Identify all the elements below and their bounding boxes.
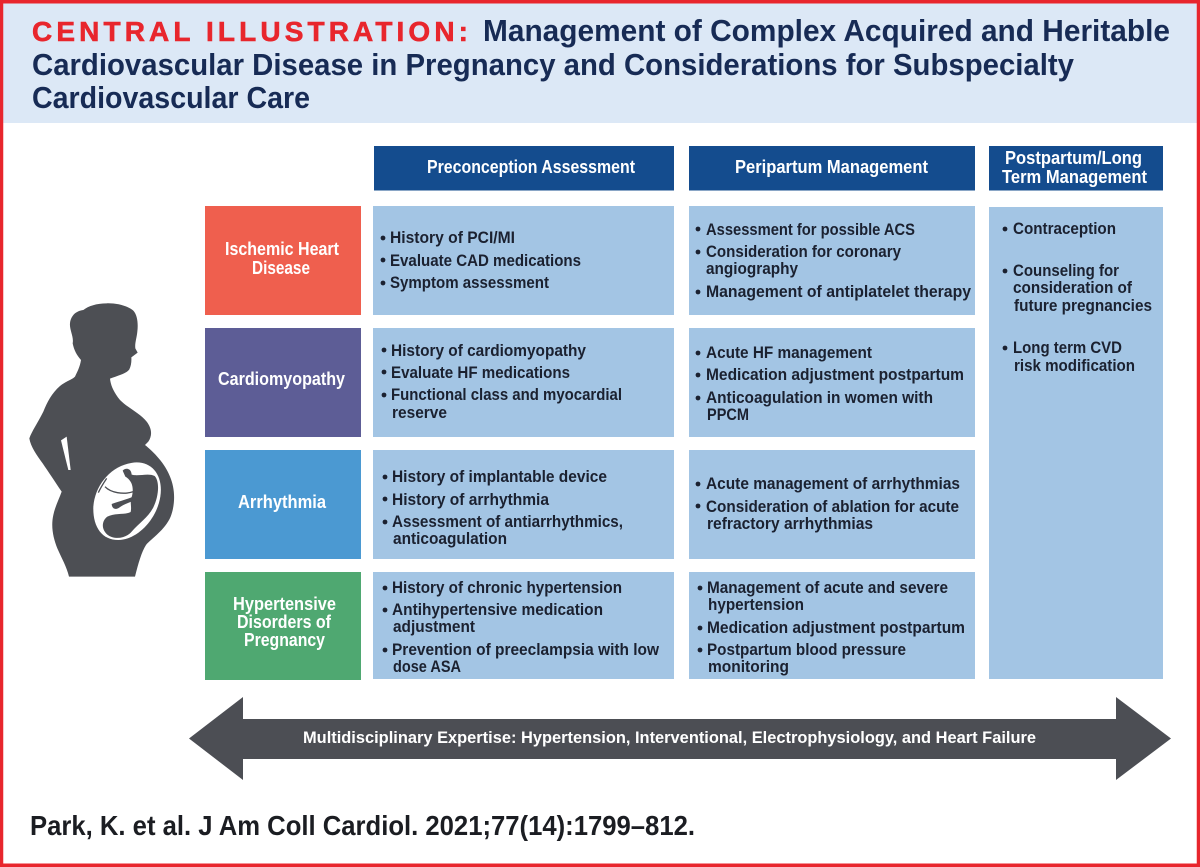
panel: postpartum long term management: risk modification bbox=[1014, 356, 1135, 375]
row label: hypertensive disorders of pregnancy: Pregnancy bbox=[244, 629, 326, 650]
panel: preconception hypertensive disorders: Prevention of preeclampsia with low bbox=[392, 640, 660, 659]
panel: peripartum cardiomyopathy: PPCM bbox=[707, 405, 749, 424]
panel: postpartum long term management: Counseling for bbox=[1013, 261, 1119, 280]
panel: preconception ischemic heart disease: History of PCI/MI bbox=[390, 228, 515, 247]
panel: preconception arrhythmia: History of arrhythmia bbox=[392, 490, 549, 509]
panel: peripartum hypertensive disorders: Management of acute and severe bbox=[707, 578, 948, 597]
panel: peripartum hypertensive disorders: hypertension bbox=[708, 595, 804, 614]
row label: arrhythmia bbox=[205, 450, 361, 559]
row label: ischemic heart disease bbox=[205, 206, 361, 315]
arrow: multidisciplinary expertise: Multidisciplinary Expertise: Hypertension, Interventional, Electrophysiology, and Heart Failure bbox=[303, 729, 1036, 747]
panel: preconception hypertensive disorders: adjustment bbox=[393, 617, 475, 636]
panel: preconception ischemic heart disease: Symptom assessment bbox=[390, 273, 549, 292]
panel: peripartum hypertensive disorders: monitoring bbox=[708, 657, 789, 676]
panel: preconception cardiomyopathy bbox=[373, 328, 674, 437]
panel: peripartum hypertensive disorders: Postpartum blood pressure bbox=[707, 640, 906, 659]
arrow: multidisciplinary expertise bbox=[189, 697, 1171, 780]
panel: preconception cardiomyopathy: Evaluate HF medications bbox=[391, 363, 570, 382]
panel: preconception cardiomyopathy: Functional class and myocardial bbox=[391, 385, 622, 404]
panel: peripartum arrhythmia: refractory arrhythmias bbox=[707, 514, 873, 533]
title line 1: Management of Complex Acquired and Heritable bbox=[483, 13, 1170, 48]
panel: preconception arrhythmia bbox=[373, 450, 674, 559]
row label: hypertensive disorders of pregnancy bbox=[205, 572, 361, 680]
panel: preconception ischemic heart disease bbox=[373, 206, 674, 315]
panel: peripartum ischemic heart disease: Assessment for possible ACS bbox=[706, 220, 915, 239]
header: postpartum long term management: Term Management bbox=[1002, 167, 1147, 187]
panel: postpartum long term management: Contraception bbox=[1013, 219, 1116, 238]
panel: peripartum cardiomyopathy: Acute HF management bbox=[706, 343, 872, 362]
panel: peripartum arrhythmia: Acute management of arrhythmias bbox=[706, 474, 960, 493]
panel: preconception hypertensive disorders bbox=[373, 572, 674, 679]
panel: peripartum ischemic heart disease: Consideration for coronary bbox=[706, 242, 901, 261]
panel: preconception cardiomyopathy: History of cardiomyopathy bbox=[391, 341, 586, 360]
header: preconception assessment: Preconception Assessment bbox=[427, 157, 635, 177]
panel: peripartum hypertensive disorders bbox=[689, 572, 975, 679]
header: postpartum long term management: Postpartum/Long bbox=[1005, 148, 1142, 168]
header: peripartum management bbox=[689, 146, 975, 190]
panel: preconception hypertensive disorders: Antihypertensive medication bbox=[392, 600, 603, 619]
panel: peripartum ischemic heart disease bbox=[689, 206, 975, 315]
panel: preconception arrhythmia: anticoagulation bbox=[393, 529, 507, 548]
panel: peripartum arrhythmia: Consideration of ablation for acute bbox=[706, 497, 959, 516]
header: peripartum management: Peripartum Management bbox=[735, 157, 928, 177]
title banner bbox=[3, 3, 1197, 123]
row label: cardiomyopathy bbox=[205, 328, 361, 437]
header: preconception assessment bbox=[374, 146, 674, 190]
panel: peripartum cardiomyopathy bbox=[689, 328, 975, 437]
icon: pregnant woman silhouette bbox=[29, 303, 174, 577]
row label: cardiomyopathy: Cardiomyopathy bbox=[218, 368, 346, 389]
title line 2: Cardiovascular Disease in Pregnancy and Considerations for Subspecialty bbox=[32, 47, 1075, 82]
header: postpartum long term management bbox=[989, 146, 1163, 190]
panel: preconception hypertensive disorders: History of chronic hypertension bbox=[392, 578, 622, 597]
panel: peripartum cardiomyopathy: Medication adjustment postpartum bbox=[706, 365, 964, 384]
row label: hypertensive disorders of pregnancy: Hypertensive bbox=[233, 593, 336, 614]
panel: peripartum hypertensive disorders: Medication adjustment postpartum bbox=[707, 618, 965, 637]
panel: preconception hypertensive disorders: dose ASA bbox=[393, 657, 461, 676]
row label: ischemic heart disease: Disease bbox=[252, 257, 310, 278]
title line 3: Cardiovascular Care bbox=[32, 80, 310, 115]
panel: preconception arrhythmia: History of implantable device bbox=[392, 467, 607, 486]
panel: postpartum long term management bbox=[989, 207, 1163, 679]
panel: peripartum cardiomyopathy: Anticoagulation in women with bbox=[706, 388, 933, 407]
row label: arrhythmia: Arrhythmia bbox=[238, 491, 327, 512]
panel: postpartum long term management: Long term CVD bbox=[1013, 338, 1122, 357]
citation: Park, K. et al. J Am Coll Cardiol. 2021;77(14):1799–812. bbox=[30, 810, 695, 841]
panel: peripartum arrhythmia bbox=[689, 450, 975, 559]
panel: preconception ischemic heart disease: Evaluate CAD medications bbox=[390, 251, 581, 270]
panel: postpartum long term management: future pregnancies bbox=[1014, 296, 1152, 315]
row label: ischemic heart disease: Ischemic Heart bbox=[225, 238, 339, 259]
row label: hypertensive disorders of pregnancy: Disorders of bbox=[237, 611, 332, 632]
panel: peripartum ischemic heart disease: angiography bbox=[706, 259, 798, 278]
panel: peripartum ischemic heart disease: Management of antiplatelet therapy bbox=[706, 282, 971, 301]
panel: preconception cardiomyopathy: reserve bbox=[392, 403, 447, 422]
panel: preconception arrhythmia: Assessment of antiarrhythmics, bbox=[392, 512, 623, 531]
panel: postpartum long term management: consideration of bbox=[1013, 278, 1132, 297]
title label: CENTRAL ILLUSTRATION: bbox=[32, 16, 468, 47]
